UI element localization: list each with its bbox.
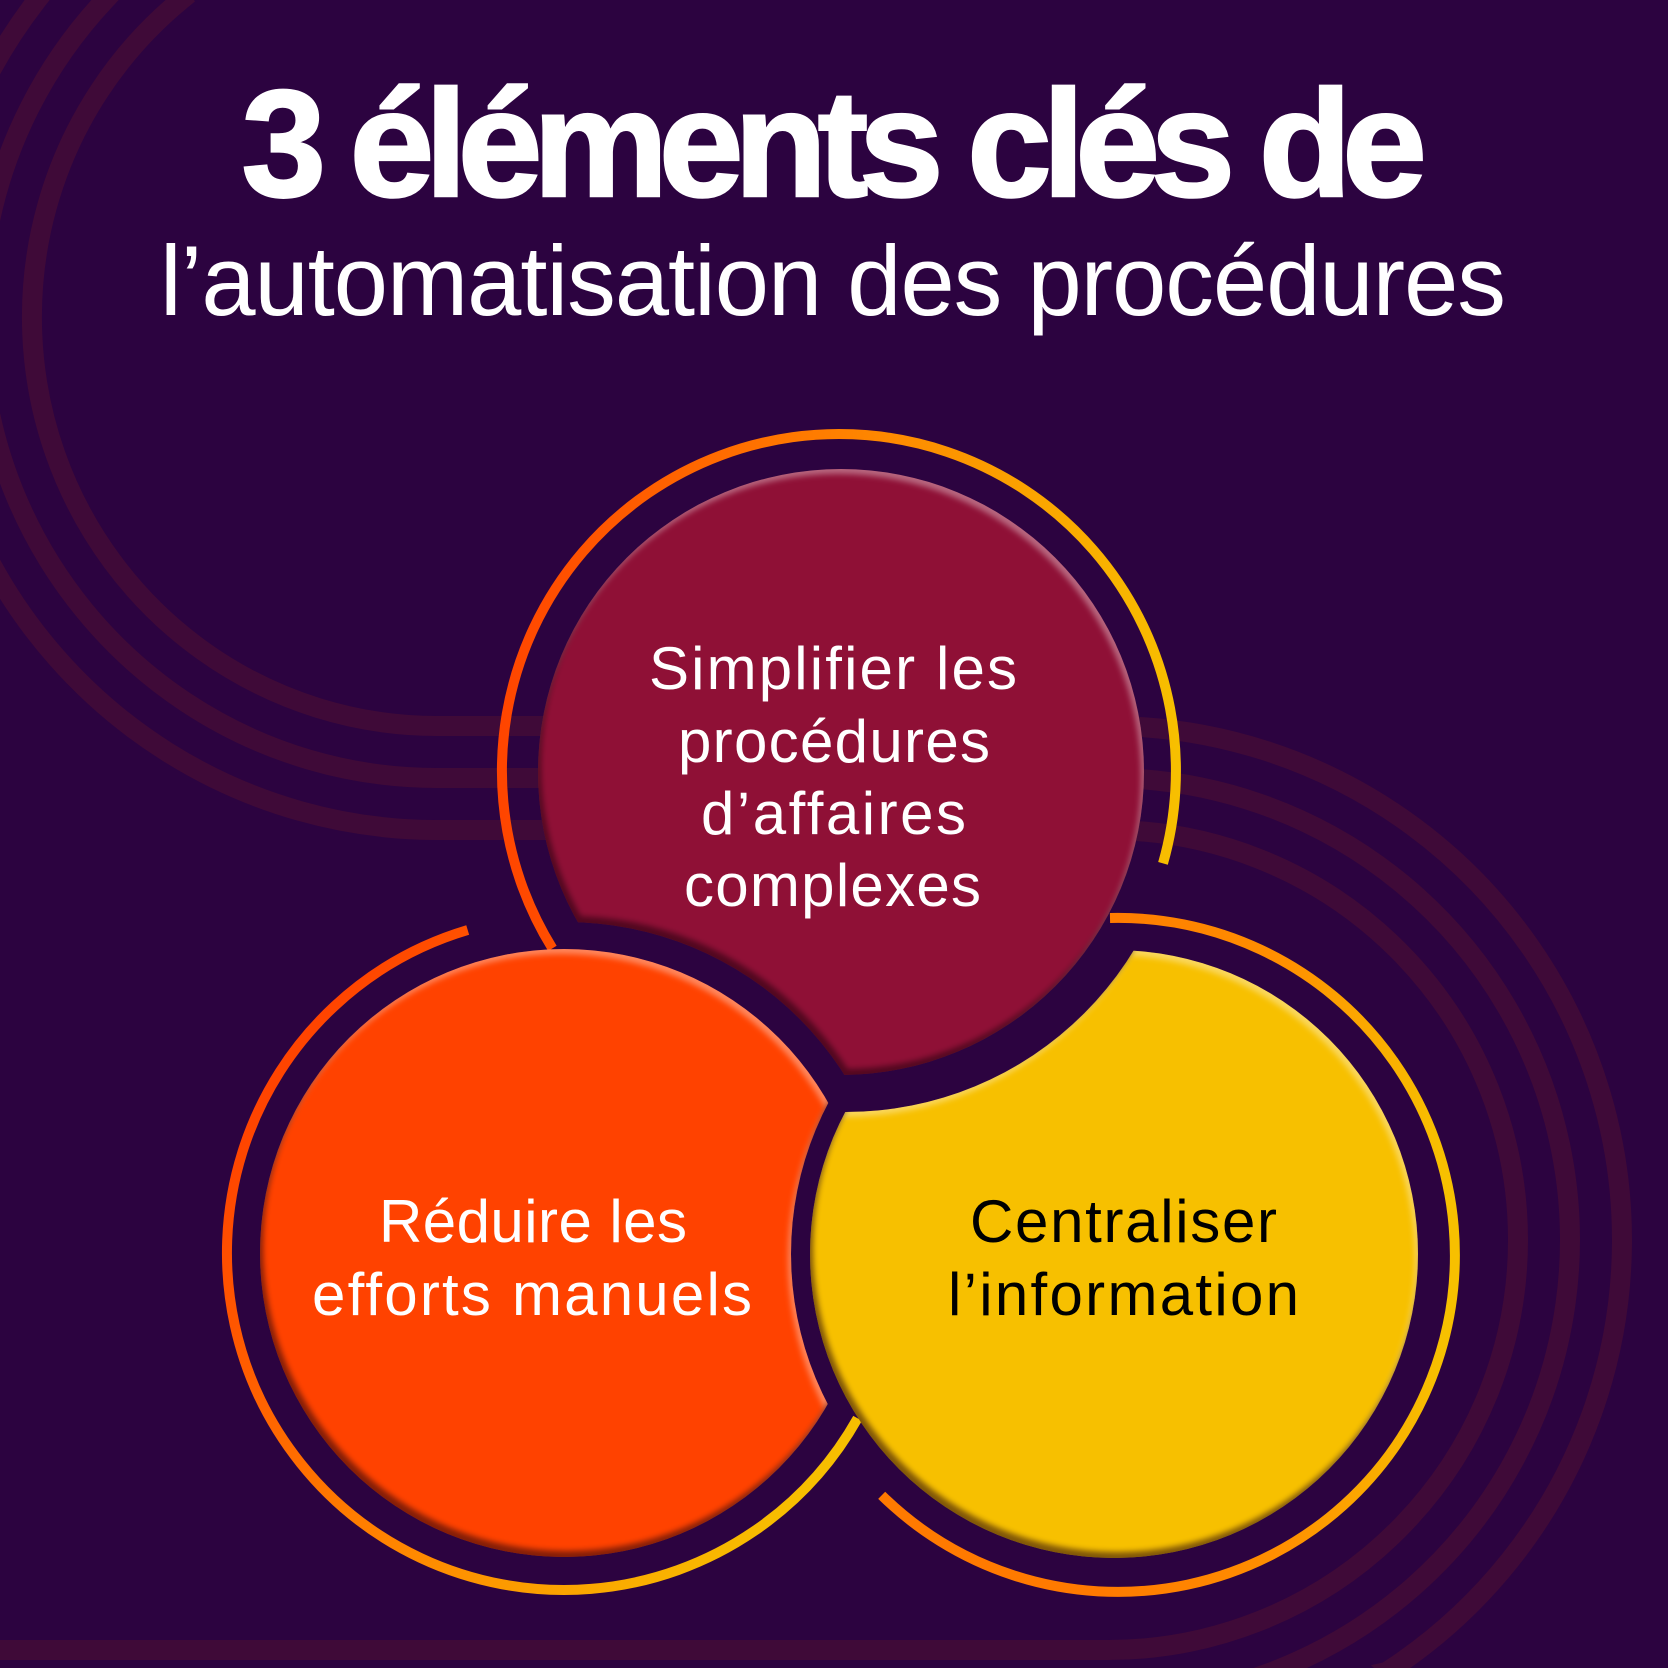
text: simplifier les procédures d'affaires complexes: procédures	[678, 708, 990, 775]
ring: left circle	[227, 930, 858, 1590]
text: réduire les efforts manuels: efforts manuels	[312, 1261, 752, 1328]
text: centraliser l'information: l’information	[948, 1261, 1299, 1328]
title line 2: l’automatisation des procédures	[160, 225, 1505, 336]
disc: top crimson	[538, 469, 1144, 1075]
disc: right yellow	[810, 950, 1418, 1558]
text: réduire les efforts manuels	[312, 1188, 752, 1328]
ring: top circle	[502, 434, 1176, 948]
text: réduire les efforts manuels: Réduire les	[379, 1188, 687, 1255]
title	[160, 59, 1505, 336]
panel: reduire	[227, 930, 868, 1590]
text: simplifier les procédures d'affaires complexes	[649, 635, 1017, 919]
title line 1: 3 éléments clés de	[242, 59, 1422, 229]
panel: centraliser	[810, 918, 1455, 1592]
text: simplifier les procédures d'affaires complexes: Simplifier les	[649, 635, 1017, 702]
text: simplifier les procédures d'affaires complexes: d’affaires	[701, 780, 966, 847]
text: simplifier les procédures d'affaires complexes: complexes	[684, 852, 981, 919]
text: centraliser l'information: Centraliser	[970, 1188, 1277, 1255]
ring: right circle	[882, 918, 1455, 1592]
disc: left orange	[260, 949, 868, 1557]
panel: simplifier	[502, 434, 1176, 1075]
text: centraliser l'information	[948, 1188, 1299, 1328]
